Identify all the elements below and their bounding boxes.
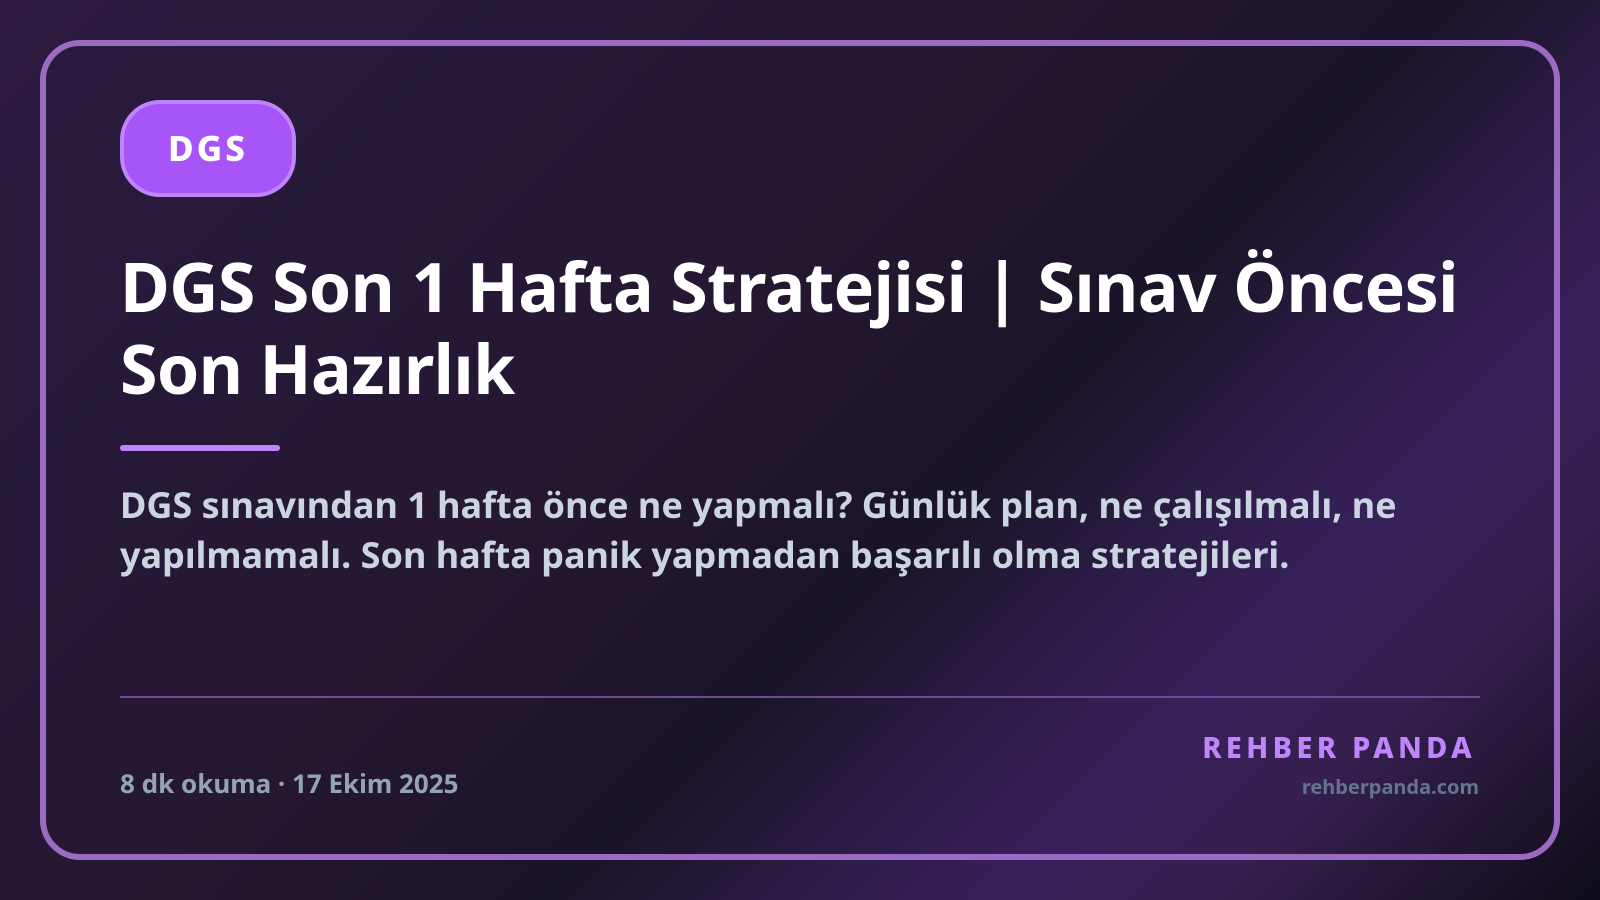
- description text: [120, 480, 1397, 579]
- badge: DGS: [120, 100, 296, 197]
- title: DGS Son 1 Hafta Stratejisi | Sınav Öncesi: [120, 239, 1458, 332]
- description text: yapılmamalı. Son hafta panik yapmadan başarılı olma stratejileri.: [120, 530, 1289, 579]
- description text: DGS sınavından 1 hafta önce ne yapmalı? Günlük plan, ne çalışılmalı, ne: [120, 480, 1397, 529]
- badge: DGS: DGS: [168, 125, 248, 172]
- title: [120, 239, 1458, 414]
- reading time and date: 8 dk okuma · 17 Ekim 2025: [120, 765, 459, 801]
- website: rehberpanda.com: [1302, 773, 1479, 800]
- title accent bar: [120, 445, 280, 451]
- brand name: REHBER PANDA: [1202, 728, 1476, 767]
- title: Son Hazırlık: [120, 321, 515, 414]
- footer divider: [120, 696, 1480, 698]
